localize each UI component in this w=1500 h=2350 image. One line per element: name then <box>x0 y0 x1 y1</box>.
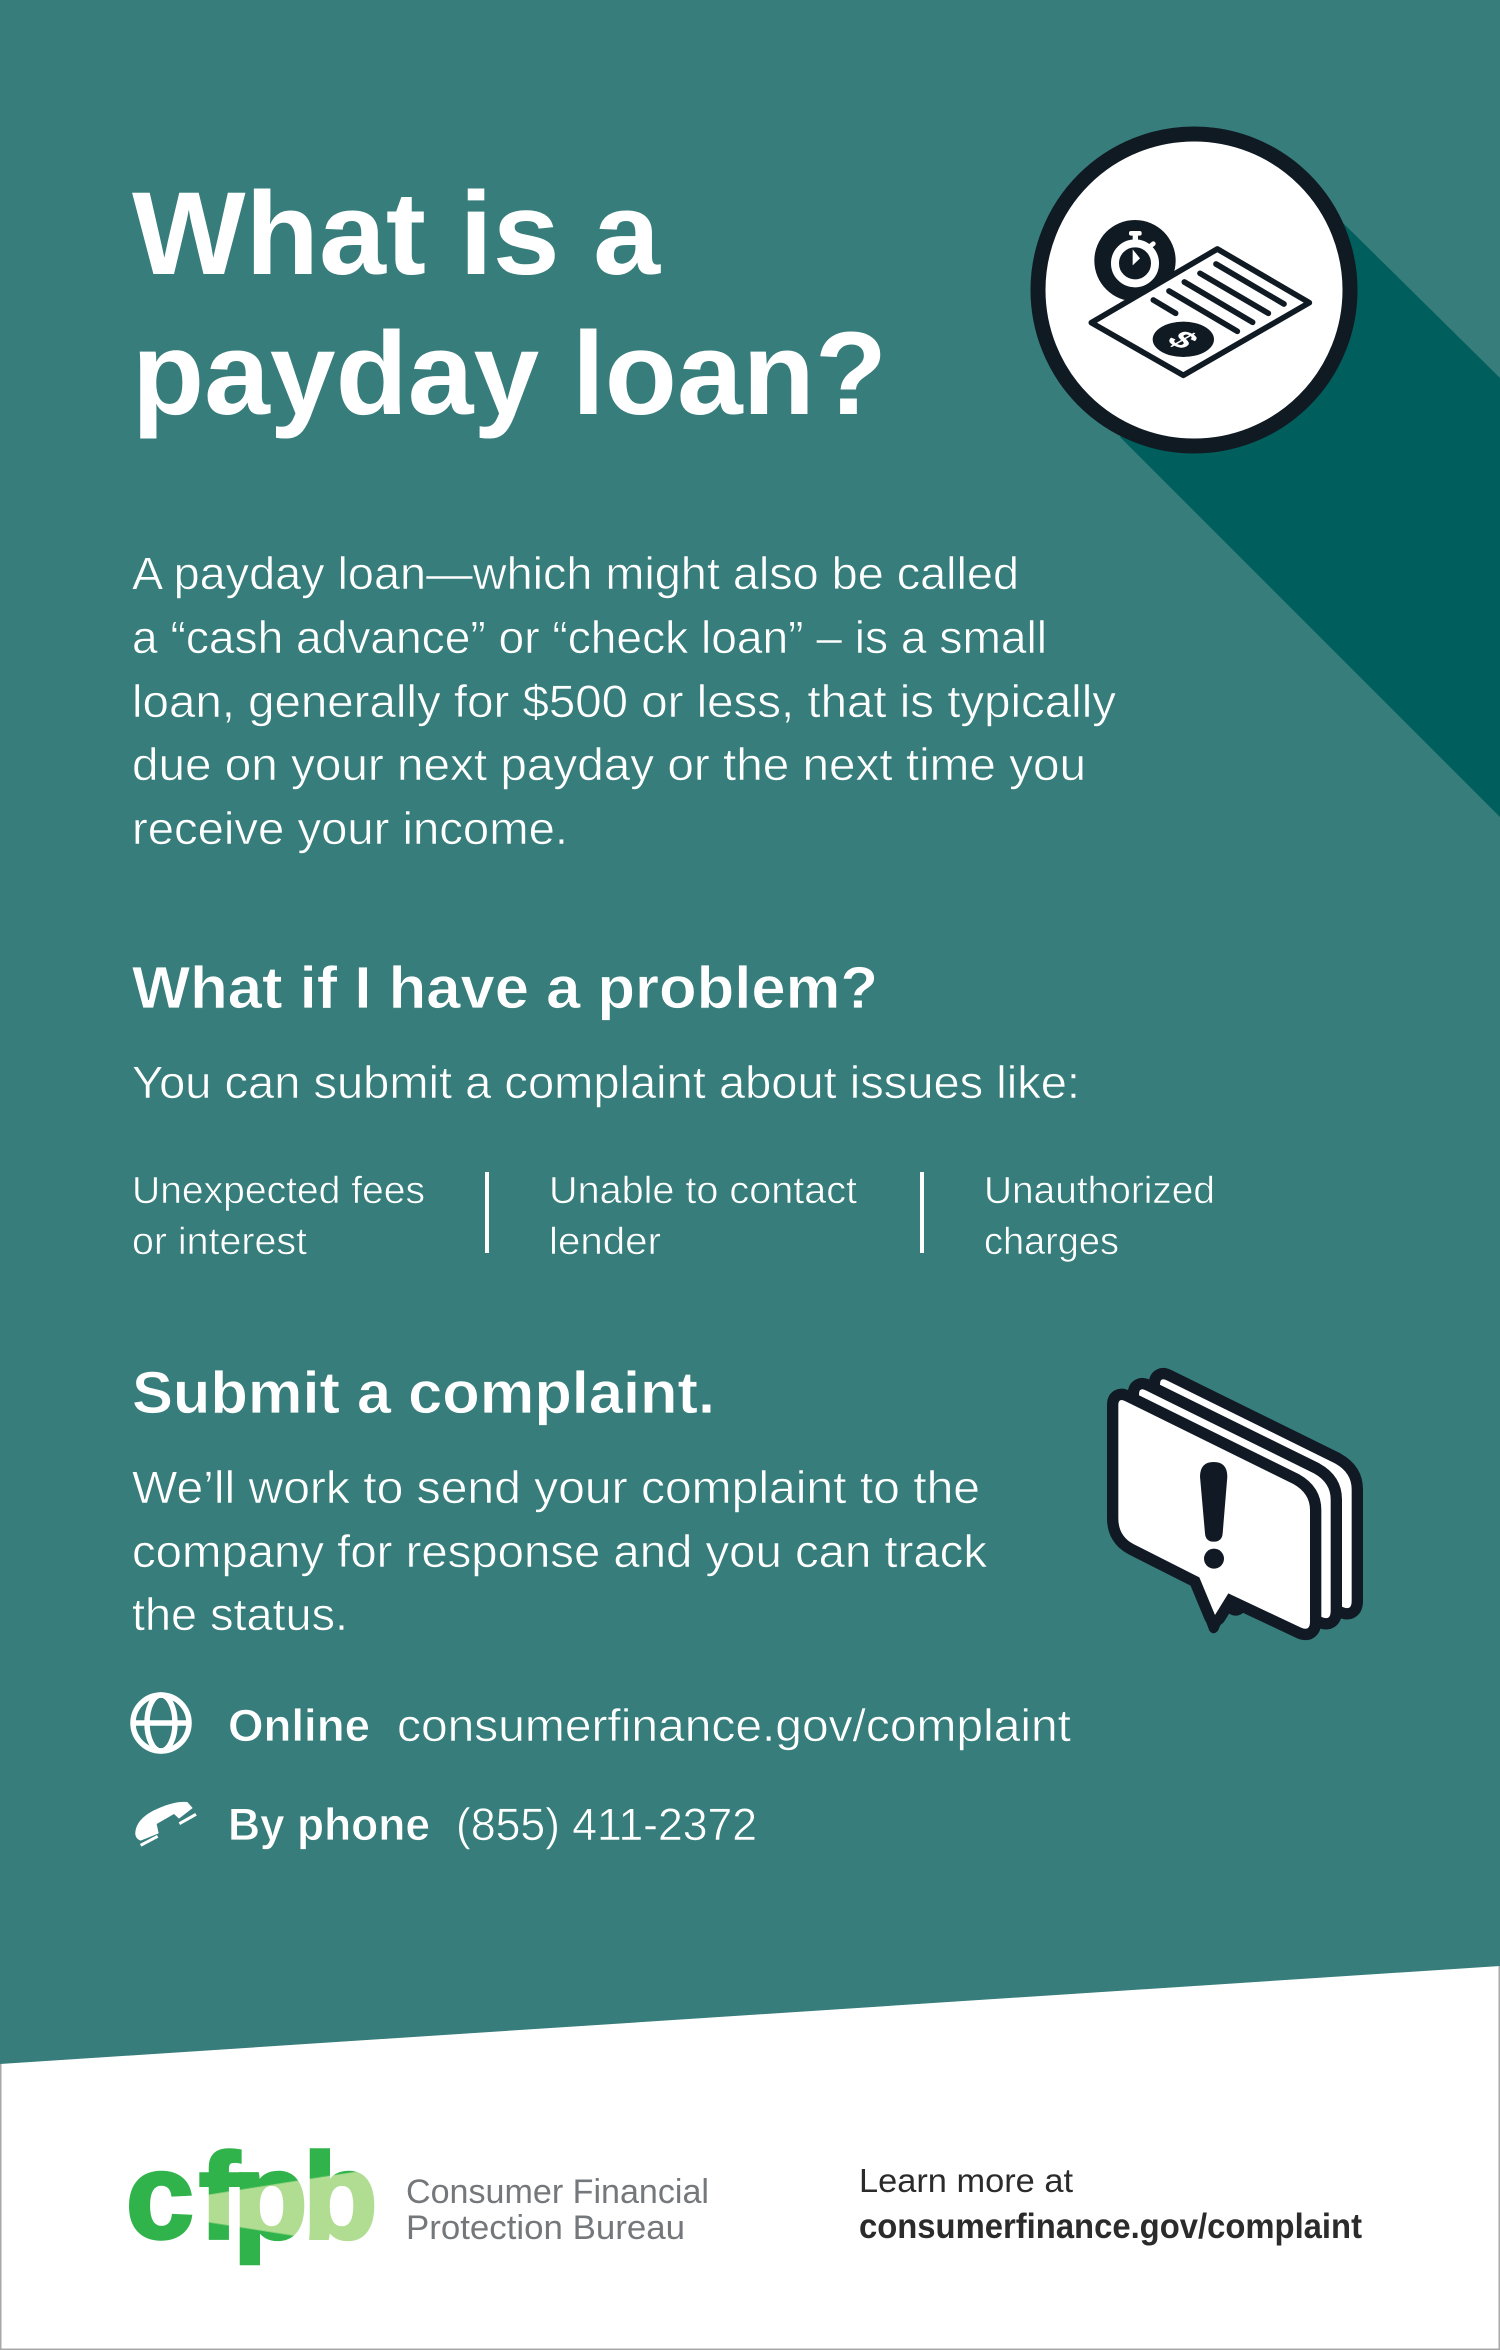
issue: unexpected fees: or interest <box>132 1221 307 1263</box>
icon: loan document and stopwatch in circle <box>1038 134 1350 446</box>
intro paragraph: A payday loan—which might also be called <box>132 548 1019 599</box>
intro paragraph: receive your income. <box>132 803 568 854</box>
learn more callout: Learn more at <box>859 2162 1073 2199</box>
heading: submit a complaint: Submit a complaint. <box>132 1360 715 1426</box>
online contact: consumerfinance.gov/complaint <box>397 1700 1072 1751</box>
logo: agency name: Protection Bureau <box>406 2209 685 2247</box>
title <box>132 168 887 440</box>
title: What is a <box>132 168 661 300</box>
issue: unexpected fees <box>132 1170 425 1263</box>
footer panel <box>0 1966 1500 2350</box>
complaint description: company for response and you can track <box>132 1526 988 1577</box>
intro paragraph: due on your next payday or the next time you <box>132 739 1086 790</box>
issue: unauthorized charges <box>984 1170 1215 1263</box>
logo: cfpb wordmark: cfpb <box>126 2128 378 2264</box>
icon: telephone handset <box>135 1802 196 1845</box>
issue: unable to contact lender: lender <box>549 1221 661 1263</box>
intro paragraph: loan, generally for $500 or less, that is typically <box>132 676 1117 727</box>
complaint description <box>132 1462 988 1640</box>
icon: stacked speech bubbles with exclamation mark <box>1118 1379 1352 1633</box>
title: payday loan? <box>132 308 887 440</box>
issue: unable to contact lender: Unable to contact <box>549 1170 857 1212</box>
icon: loan document and stopwatch in circle: $ <box>1158 326 1207 354</box>
intro paragraph <box>132 548 1117 854</box>
issue: unauthorized charges: Unauthorized <box>984 1170 1215 1212</box>
logo: agency name: Consumer Financial <box>406 2173 709 2211</box>
phone contact: By phone <box>228 1799 430 1850</box>
issue: unexpected fees: Unexpected fees <box>132 1170 425 1212</box>
learn more callout <box>859 2162 1362 2246</box>
issue: unauthorized charges: charges <box>984 1221 1119 1263</box>
logo: agency name <box>406 2173 709 2247</box>
icon: globe <box>133 1695 189 1751</box>
complaint description: We’ll work to send your complaint to the <box>132 1462 980 1513</box>
intro paragraph: a “cash advance” or “check loan” – is a small <box>132 612 1047 663</box>
long diagonal shadow <box>1120 223 1500 817</box>
complaint description: the status. <box>132 1589 348 1640</box>
online contact: Online <box>228 1700 370 1751</box>
phone contact: (855) 411-2372 <box>456 1799 757 1850</box>
issue: unable to contact lender <box>549 1170 857 1263</box>
complaint intro line: You can submit a complaint about issues like: <box>132 1057 1080 1108</box>
heading: what if I have a problem: What if I have a problem? <box>132 955 878 1021</box>
learn more callout: consumerfinance.gov/complaint <box>859 2207 1362 2246</box>
phone contact <box>228 1799 757 1850</box>
